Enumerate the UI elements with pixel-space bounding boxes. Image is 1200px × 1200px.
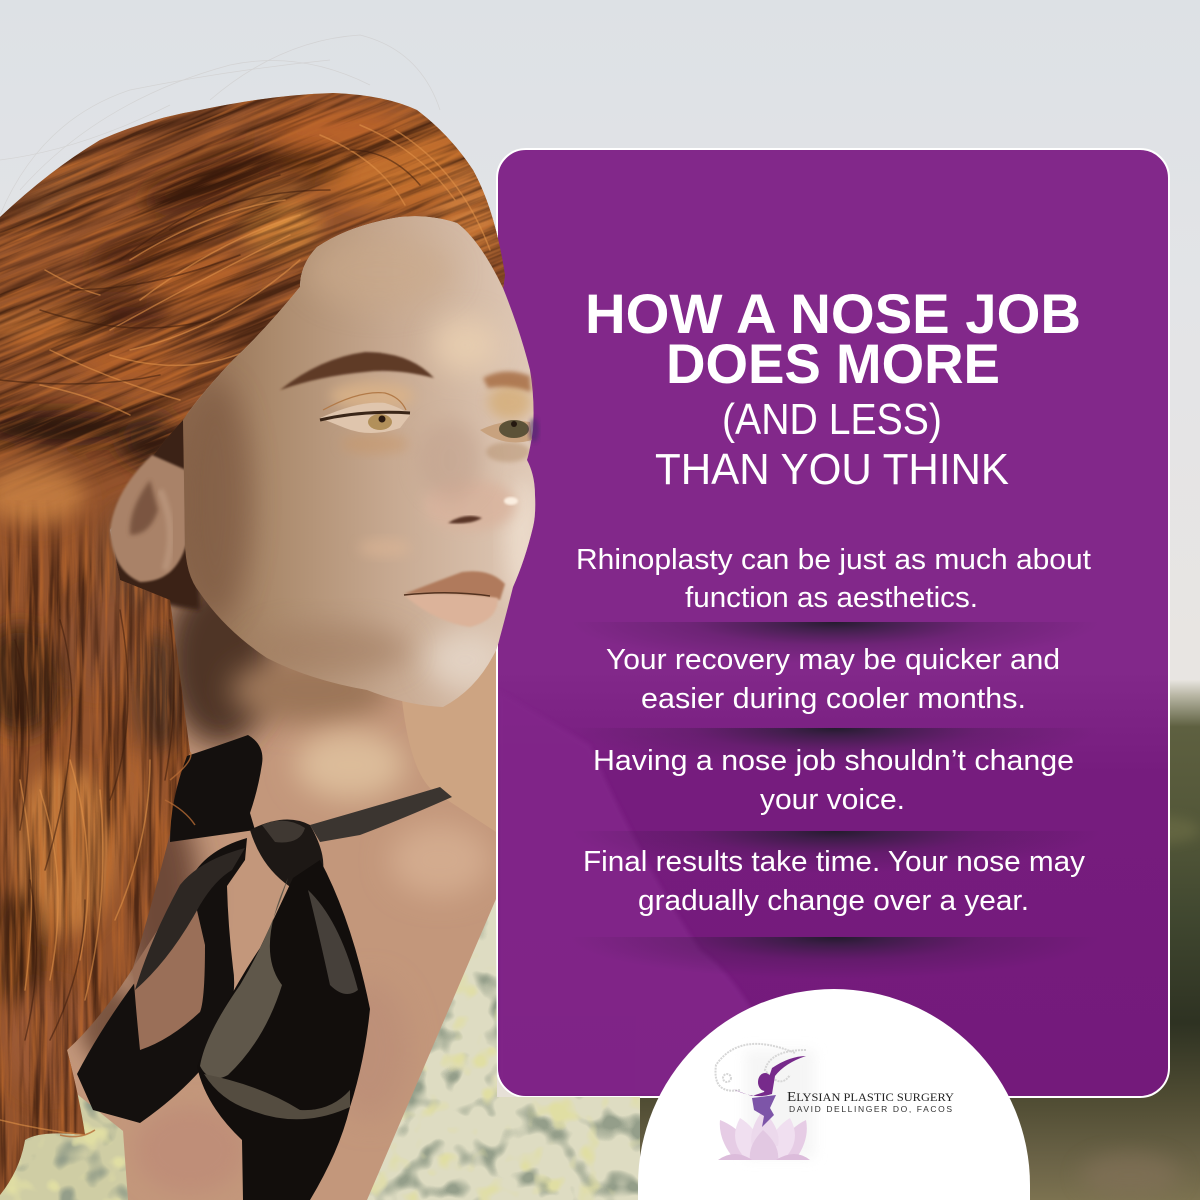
ribbon: left tail <box>77 838 247 1123</box>
face <box>179 216 539 707</box>
ribbon: grey sheen bands <box>200 878 288 1078</box>
ribbon: top loop <box>170 735 262 842</box>
hair fibre texture: crown <box>0 93 505 490</box>
logo wordmark: ELYSIAN PLASTIC SURGERY <box>787 1090 955 1105</box>
eye socket shading <box>330 382 414 410</box>
text block: voice: your voice. <box>760 784 905 816</box>
text block: voice <box>593 745 1074 816</box>
flyaway hair strands <box>0 35 440 215</box>
text block: recovery: Your recovery may be quicker and <box>606 644 1060 676</box>
black ribbon <box>77 735 452 1200</box>
nose <box>433 484 520 526</box>
text block: voice: Having a nose job shouldn’t change <box>593 745 1074 777</box>
text block: function: function as aesthetics. <box>685 582 978 614</box>
logo wordmark: DAVID DELLINGER DO, FACOS <box>789 1104 952 1114</box>
text block: recovery: easier during cooler months. <box>641 683 1026 715</box>
text block: final results: gradually change over a year. <box>638 885 1029 917</box>
hair strands <box>0 125 490 1135</box>
panel: purple content card <box>497 149 1169 1097</box>
neck and chest <box>67 588 496 1200</box>
ribbon: right loop <box>197 860 370 1200</box>
blurred hair behind neck <box>380 640 497 845</box>
lips <box>404 571 505 627</box>
nostril and nose highlight <box>448 516 482 523</box>
photo: woman in profile <box>0 0 780 1200</box>
logo badge <box>638 989 1030 1200</box>
floral dress <box>0 890 650 1200</box>
shadow behind ear <box>110 415 200 610</box>
icon: lotus with dancer <box>716 1044 815 1160</box>
text block: recovery <box>606 644 1060 715</box>
hair tips over ribbon <box>60 752 195 1137</box>
text block: final results: Final results take time. Your nose may <box>583 846 1086 878</box>
text block: function: Rhinoplasty can be just as much about <box>576 544 1091 576</box>
heading: DOES MORE <box>666 332 1000 395</box>
heading: (AND LESS) <box>722 395 942 444</box>
logo wordmark <box>787 1090 955 1114</box>
hair tone blotches <box>0 108 505 1095</box>
icon: ear <box>110 455 186 582</box>
eyes <box>320 403 410 433</box>
hair fibre texture: lengths <box>0 507 190 1192</box>
ribbon: knot <box>250 820 323 890</box>
face light and shade <box>179 236 538 690</box>
heading: HOW A NOSE JOB <box>585 282 1081 345</box>
eyebrows <box>280 352 434 390</box>
text block: final results <box>583 846 1086 917</box>
heading <box>585 282 1081 494</box>
heading: THAN YOU THINK <box>655 445 1009 494</box>
ribbon: collar strand <box>310 787 452 842</box>
text block: function <box>576 544 1091 614</box>
hair mass <box>0 93 535 1198</box>
